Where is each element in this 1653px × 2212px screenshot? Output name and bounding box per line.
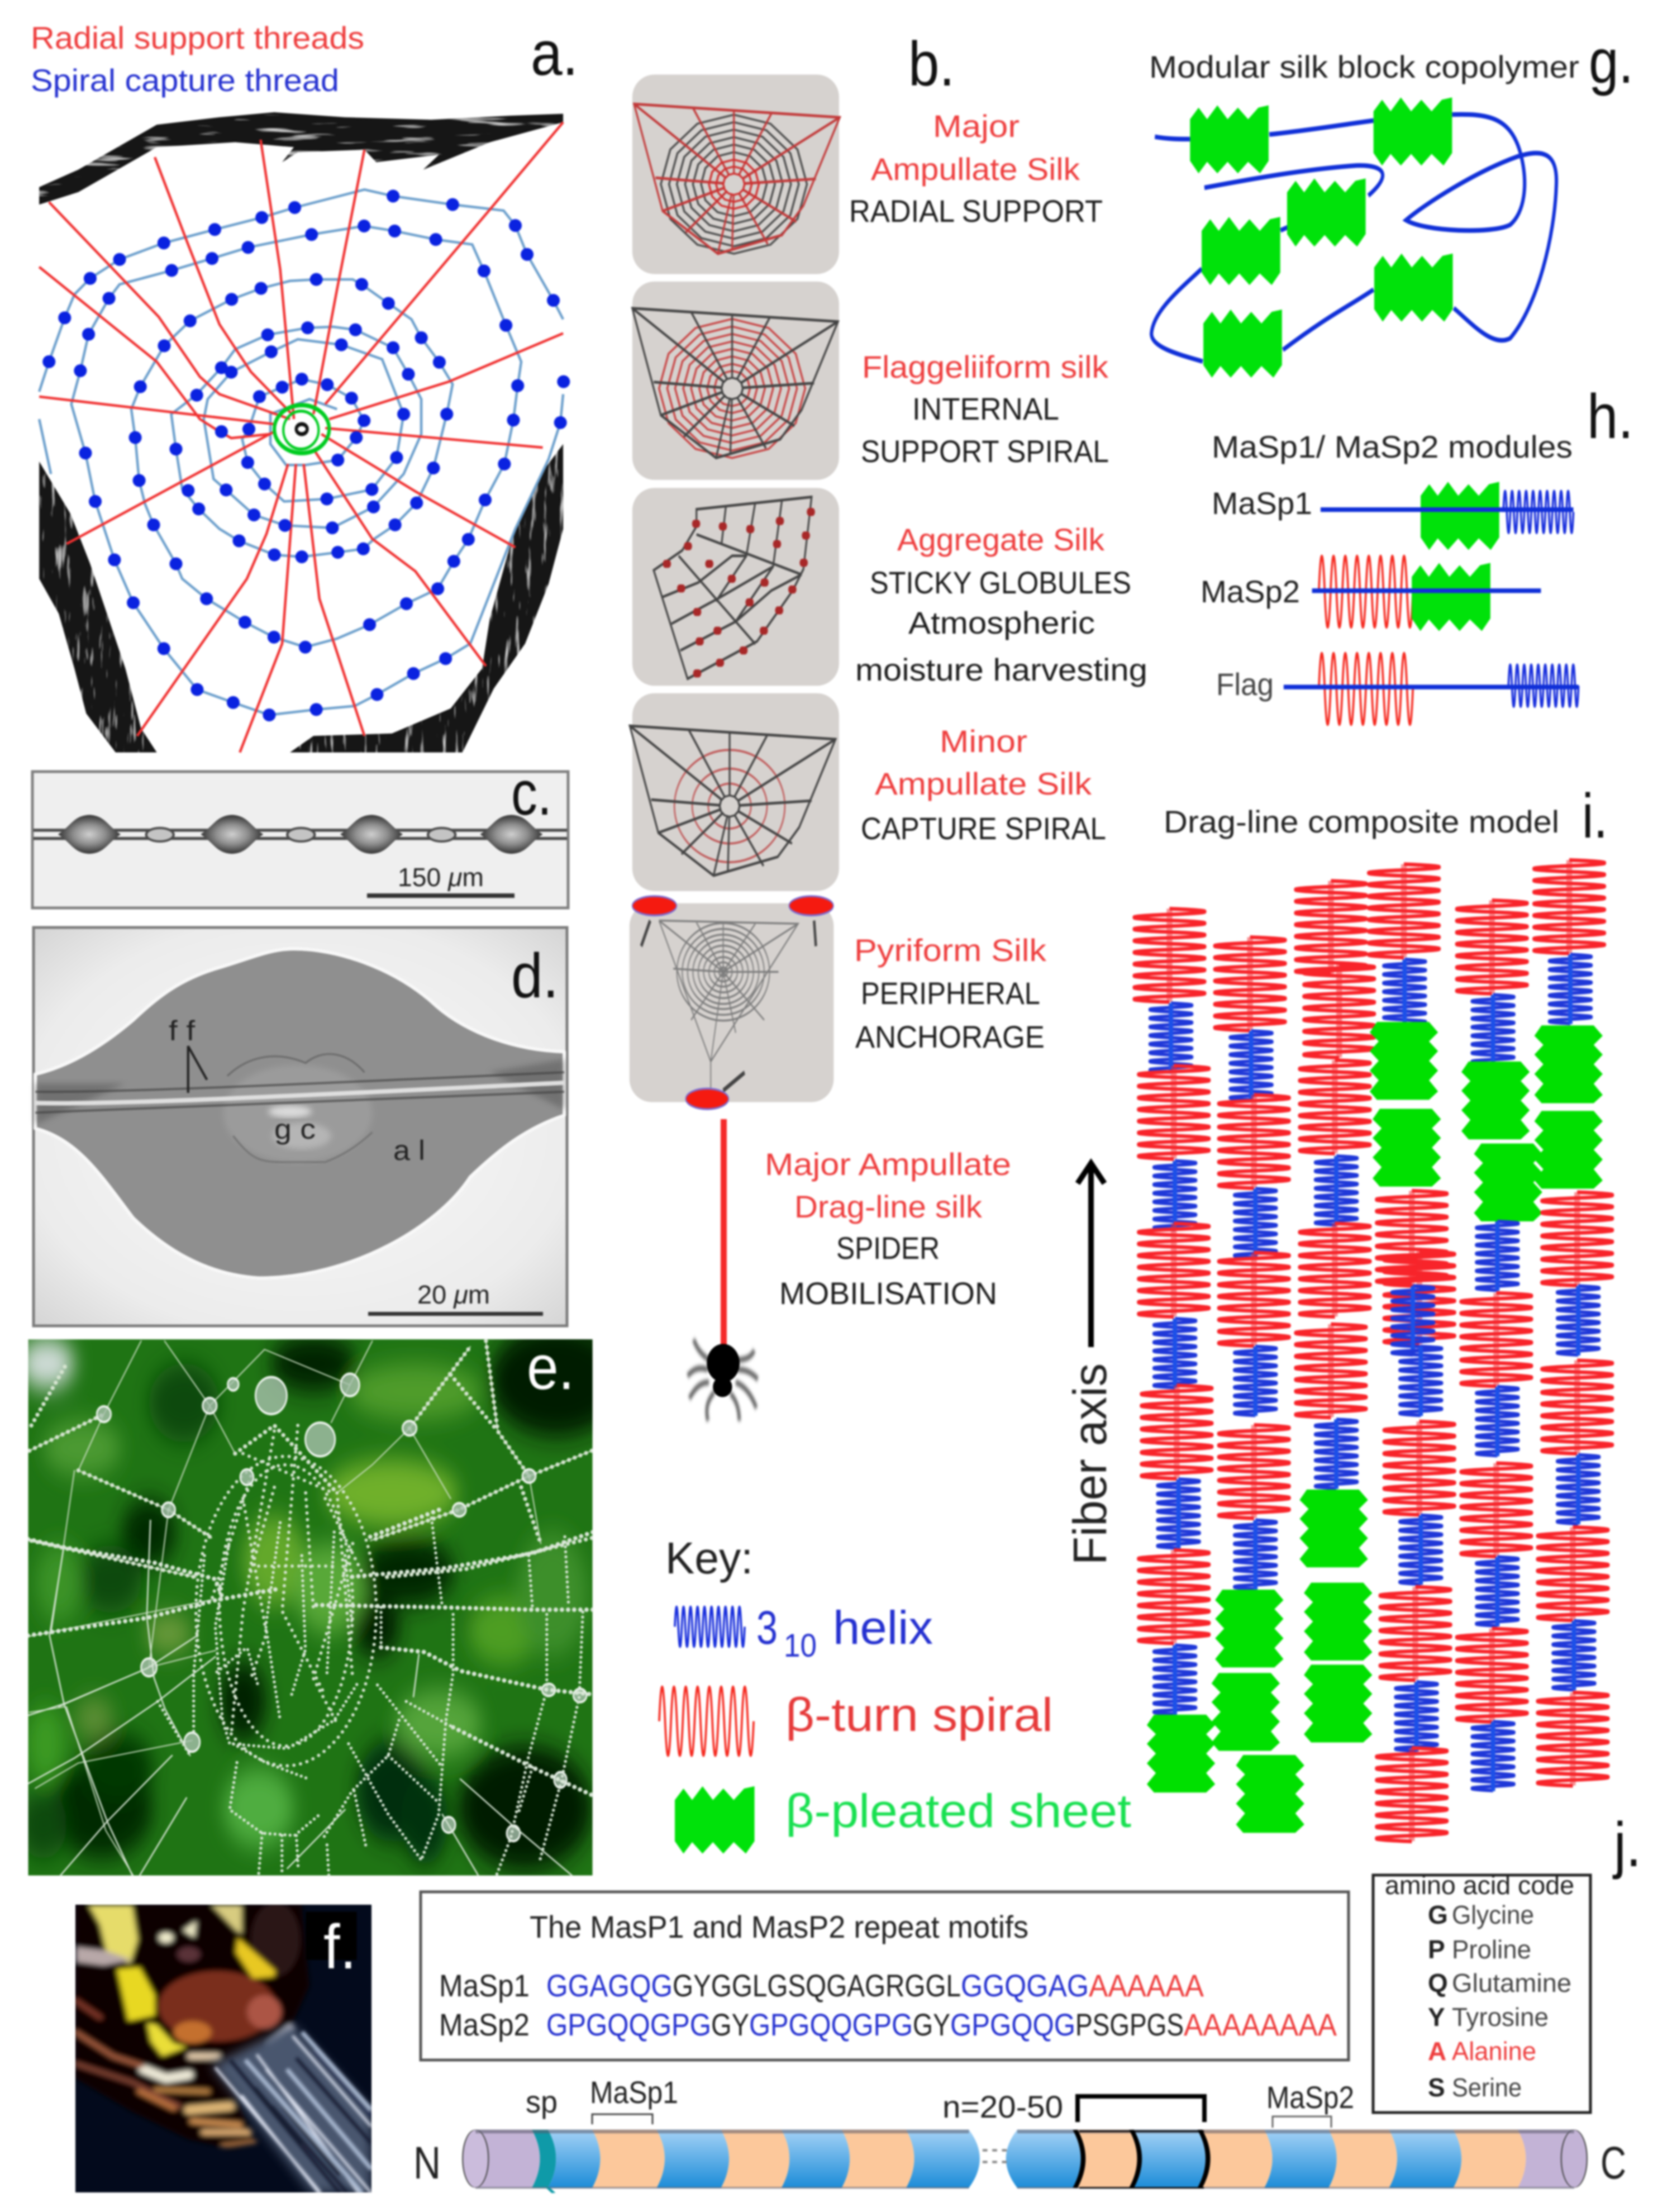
code Q: Q [1428, 1968, 1448, 1997]
MaSp1 sequence [439, 1968, 1204, 2003]
panel j: repeat motifs box [421, 1892, 1349, 2060]
MaSp2 sequence: GY [913, 2007, 950, 2042]
panel e: dew on spider web photo [20, 1324, 623, 1876]
label h: h. [1587, 382, 1633, 451]
labels ff gc al: g c [274, 1114, 316, 1145]
key: beta-turn spiral: β-turn spiral [785, 1688, 1053, 1741]
text: aggregate silk: Atmospheric [908, 605, 1095, 640]
row MaSp1: MaSp1 [1212, 486, 1312, 521]
MaSp2 sequence: GPGQQGPG [749, 2007, 913, 2042]
spider body [75, 1902, 309, 2149]
panel: amino acid code [1373, 1871, 1590, 2113]
panel g: modular silk block copolymer [1149, 26, 1633, 378]
text: aggregate silk: STICKY GLOBULES [870, 565, 1131, 600]
key title: Key: [665, 1533, 753, 1583]
panel i: drag-line composite model [1064, 781, 1613, 1842]
drag line thread [721, 1119, 727, 1347]
scale bar d [368, 1280, 543, 1316]
column 6 [1533, 860, 1613, 1786]
MaSp2 sequence: AAAAAAAA [1184, 2007, 1337, 2042]
MaSp2 sequence: GPGQQGPG [546, 2007, 711, 2042]
text: major ampullate silk: Ampullate Silk [871, 151, 1080, 187]
terminus C: C [1600, 2138, 1626, 2189]
panel a: orb web diagram [39, 112, 564, 753]
MaSp2 sequence: PSGPGS [1075, 2007, 1184, 2042]
text: flagelliform silk: Flaggeliiform silk [862, 349, 1109, 384]
web dew lines [30, 1341, 592, 1876]
text: major ampullate silk [849, 108, 1103, 229]
panel c: droplet micrograph [32, 758, 568, 908]
MaSp1 sequence: GGQGAG [961, 1968, 1089, 2003]
key: beta-turn spiral [659, 1687, 1053, 1756]
text: flagelliform silk: INTERNAL [912, 391, 1059, 426]
card: minor ampullate silk web [630, 693, 839, 891]
panel: amino acid code: amino acid code [1385, 1871, 1574, 1900]
panel f: spinnerets photo [75, 1902, 371, 2194]
label g: g. [1589, 26, 1633, 96]
text: drag-line silk: Drag-line silk [794, 1189, 983, 1224]
web hub [274, 405, 329, 453]
key: helix: helix [833, 1601, 933, 1654]
text: pyriform silk: Pyriform Silk [854, 933, 1047, 968]
heading motifs: The MasP1 and MasP2 repeat motifs [530, 1909, 1028, 1944]
text: pyriform silk: PERIPHERAL [861, 976, 1040, 1011]
label f: f. [323, 1912, 356, 1982]
label e: e. [527, 1333, 574, 1402]
heading i: Drag-line composite model [1164, 804, 1559, 839]
text: drag-line silk: MOBILISATION [779, 1276, 997, 1311]
text: drag-line silk: SPIDER [836, 1230, 940, 1266]
column 1 [1133, 908, 1215, 1792]
panel h: MaSp modules [1201, 382, 1633, 725]
row MaSp2 [1201, 556, 1541, 631]
key: helix: 10 [784, 1628, 817, 1664]
heading g: Modular silk block copolymer [1149, 49, 1579, 84]
row Flag [1216, 653, 1579, 725]
label MaSp1 with bracket: MaSp1 [590, 2075, 678, 2110]
key: helix: 3 [756, 1601, 778, 1654]
code A: Alanine [1452, 2037, 1536, 2066]
panel d: glue droplet micrograph [34, 927, 567, 1326]
label c: c. [511, 758, 552, 828]
text: minor ampullate silk [861, 724, 1106, 846]
text: major ampullate silk: RADIAL SUPPORT [849, 193, 1103, 229]
MaSp1 sequence: GGAGQG [546, 1968, 673, 2003]
key: helix [675, 1601, 933, 1664]
row MaSp2: MaSp2 [1201, 574, 1300, 609]
MaSp2 sequence: MaSp2 [439, 2007, 530, 2042]
label backing [306, 1912, 357, 1960]
code Q: Glutamine [1452, 1968, 1571, 1997]
capture spiral line [39, 189, 563, 715]
label sp: sp [526, 2084, 558, 2119]
droplet body [35, 949, 564, 1278]
text: pyriform silk [854, 933, 1047, 1054]
highlighted repeat [1075, 2130, 1208, 2188]
text: pyriform silk: ANCHORAGE [855, 1019, 1045, 1054]
key: beta-pleated sheet: β-pleated sheet [785, 1785, 1131, 1837]
text: minor ampullate silk: Ampullate Silk [875, 766, 1092, 801]
MaSp2 sequence: GPGQQG [950, 2007, 1075, 2042]
code P: Proline [1452, 1935, 1531, 1964]
text: aggregate silk: moisture harvesting [855, 652, 1147, 687]
copolymer diagram [1151, 97, 1556, 378]
labels ff gc al [169, 1015, 425, 1166]
code Y: Tyrosine [1452, 2002, 1549, 2032]
large dew drops [97, 1374, 587, 1841]
text: drag-line silk: Major Ampullate [765, 1147, 1011, 1182]
column 4 [1368, 864, 1455, 1842]
labels ff gc al: a l [393, 1135, 425, 1166]
text: drag-line silk [765, 1147, 1011, 1311]
text: major ampullate silk: Major [933, 108, 1020, 144]
legend: web thread colours: Radial support threads [31, 20, 364, 55]
label j: j. [1612, 1810, 1641, 1880]
MaSp1 sequence: GYGGLGSQGAGRGGL [673, 1968, 961, 2003]
text: flagelliform silk [861, 349, 1109, 469]
panel b: silk types [630, 29, 1147, 1421]
fiber axis label: Fiber axis [1064, 1363, 1116, 1565]
code P: P [1428, 1935, 1445, 1964]
support strands [39, 112, 563, 753]
code Y: Y [1428, 2002, 1445, 2032]
card: flagelliform silk web [632, 282, 839, 480]
code A: A [1428, 2037, 1446, 2066]
column 5 [1456, 900, 1542, 1791]
scale bar c [367, 863, 515, 898]
bracket n=20-50: n=20-50 [942, 2089, 1063, 2124]
card: pyriform silk anchorage [630, 896, 833, 1109]
silk threads [211, 2025, 371, 2193]
icon: spider [688, 1339, 758, 1421]
panel: fibroin gene cylinder [413, 2075, 1626, 2193]
code G: Glycine [1452, 1900, 1534, 1929]
MaSp1 sequence: MaSp1 [439, 1968, 530, 2003]
label a: a. [531, 18, 578, 88]
arrow: fiber axis [1078, 1163, 1104, 1347]
capture droplets [49, 196, 564, 715]
label i: i. [1582, 781, 1608, 851]
key [659, 1533, 1131, 1854]
key: beta-pleated sheet [675, 1785, 1131, 1854]
heading h: MaSp1/ MaSp2 modules [1212, 429, 1573, 464]
label b: b. [908, 29, 955, 99]
text: aggregate silk: Aggregate Silk [897, 522, 1105, 557]
code S: S [1428, 2073, 1445, 2102]
MaSp2 sequence [439, 2007, 1337, 2042]
text: aggregate silk [855, 522, 1147, 687]
MaSp1 sequence: AAAAAA [1089, 1968, 1204, 2003]
legend: web thread colours: Spiral capture thread [31, 63, 339, 98]
text: minor ampullate silk: Minor [940, 724, 1027, 759]
column 2 [1212, 937, 1304, 1833]
text: minor ampullate silk: CAPTURE SPIRAL [861, 811, 1106, 846]
fibre block model [1133, 860, 1613, 1842]
label d: d. [511, 941, 559, 1011]
code G: G [1428, 1900, 1448, 1929]
code S: Serine [1452, 2073, 1522, 2102]
photo background blotches [20, 1324, 623, 1870]
bracket n=20-50 [942, 2089, 1204, 2124]
thread and beads [34, 815, 567, 854]
column 3 [1295, 881, 1375, 1743]
labels ff gc al: f f [169, 1015, 195, 1046]
scale bar d: 20 μm [417, 1280, 490, 1309]
text: flagelliform silk: SUPPORT SPIRAL [861, 434, 1109, 469]
legend: web thread colours [31, 20, 364, 98]
scale bar c: 150 μm [398, 863, 484, 892]
row MaSp1 [1212, 482, 1573, 550]
cylinder segments [463, 2130, 1587, 2193]
terminus N: N [413, 2138, 441, 2189]
card: aggregate silk droplets [632, 488, 839, 686]
radial threads [39, 122, 563, 753]
label MaSp1 with bracket [590, 2075, 678, 2124]
MaSp2 sequence: GY [711, 2007, 749, 2042]
label MaSp2 with bracket [1266, 2080, 1354, 2128]
row Flag: Flag [1216, 667, 1274, 702]
label MaSp2 with bracket: MaSp2 [1266, 2080, 1354, 2115]
lower web mesh [28, 1509, 593, 1876]
card: major ampullate silk web [632, 74, 840, 274]
